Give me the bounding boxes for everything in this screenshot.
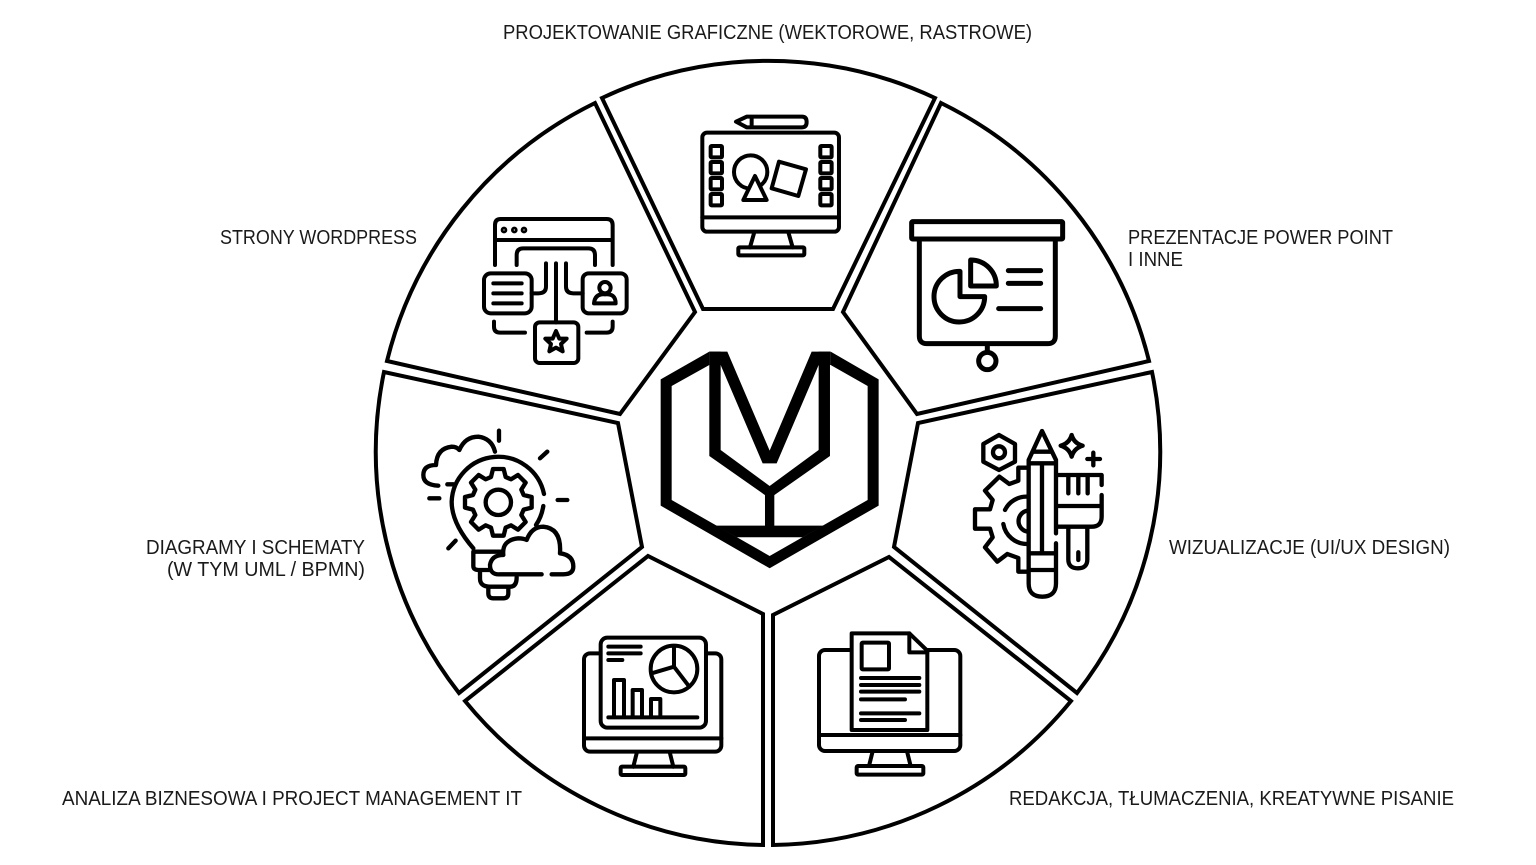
icon: monitor with shapes and pencil: [702, 117, 839, 255]
icon: gear, pencil and brush: [975, 431, 1102, 597]
icon: light bulb with gear and clouds: [423, 431, 573, 598]
panel: centre hub with logo: [661, 352, 879, 568]
panel: editing and translation segment: [773, 557, 1071, 845]
label: WordPress: STRONY WORDPRESS: [220, 227, 417, 249]
label: business analysis: ANALIZA BIZNESOWA I PROJECT MANAGEMENT IT: [62, 788, 522, 810]
logo: M monogram in hexagon: [661, 352, 879, 568]
icon: presentation board with pie chart: [912, 222, 1063, 370]
panel: WordPress segment: [387, 103, 695, 414]
icon: monitor with document: [819, 633, 960, 775]
label: diagrams: (W TYM UML / BPMN): [167, 559, 365, 581]
icon: monitor with charts: [584, 638, 721, 775]
label: presentations: [1128, 227, 1393, 271]
panel: visualisations segment: [894, 372, 1160, 693]
label: presentations: I INNE: [1128, 249, 1183, 271]
label: diagrams: [146, 537, 365, 581]
icon: website structure: [484, 219, 627, 363]
label: visualisations: WIZUALIZACJE (UI/UX DESIGN): [1169, 537, 1450, 559]
panel: graphic design segment: [602, 61, 935, 309]
panel: presentations segment: [843, 103, 1149, 414]
label: presentations: PREZENTACJE POWER POINT: [1128, 227, 1393, 249]
panel: business analysis segment: [465, 556, 763, 845]
label: editing: REDAKCJA, TŁUMACZENIA, KREATYWNE PISANIE: [1009, 788, 1454, 810]
panel: diagrams segment: [376, 372, 642, 693]
label: diagrams: DIAGRAMY I SCHEMATY: [146, 537, 365, 559]
label: graphic design: PROJEKTOWANIE GRAFICZNE (WEKTOROWE, RASTROWE): [503, 22, 1032, 44]
